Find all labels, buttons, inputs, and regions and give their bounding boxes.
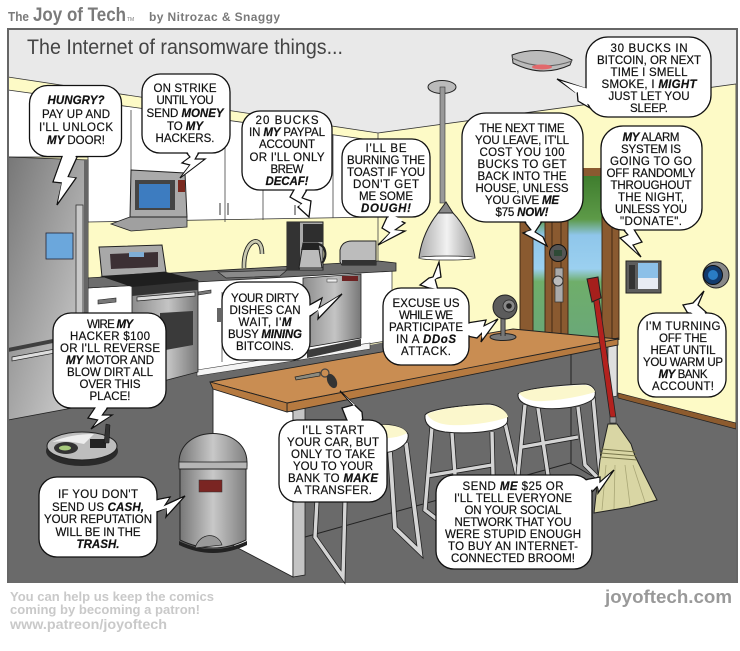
speech bubble: alarm system: "DONATE". [620, 216, 682, 228]
speech bubble: lamp and security camera: WHILE WE [399, 310, 453, 322]
speech bubble: toaster: I'LL BE [366, 143, 407, 155]
speech bubble: robot vacuum: BLOW DIRT ALL [67, 367, 154, 379]
footer: patreon message [9, 590, 214, 632]
speech bubble: fridge: MY DOOR! [47, 135, 105, 147]
speech bubble: trash can [39, 477, 185, 557]
speech bubble: microwave: ON STRIKE [154, 83, 217, 95]
speech bubble: coffee maker: IN MY PAYPAL [249, 127, 326, 139]
header: The Joy of Tech by Nitrozac & Snaggy: by Nitrozac & Snaggy [149, 10, 280, 24]
speech bubble: car keys [279, 391, 387, 502]
speech bubble: lamp and security camera: ATTACK. [401, 346, 451, 358]
speech bubble: dishwasher [222, 282, 342, 360]
header: The Joy of Tech by Nitrozac & Snaggy [8, 5, 280, 26]
speech bubble: door lock: YOU GIVE ME [485, 195, 559, 207]
speech bubble: microwave: HACKERS. [156, 133, 214, 145]
speech bubble: car keys: YOUR CAR, BUT [287, 437, 379, 449]
speech bubble: alarm system: SYSTEM IS [621, 144, 681, 156]
speech bubble: lamp and security camera: PARTICIPATE [389, 322, 463, 334]
speech bubble: trash can: WILL BE IN THE [56, 527, 141, 539]
icon: refrigerator [8, 157, 88, 420]
speech bubble: toaster [342, 139, 430, 245]
icon: smart door lock [550, 244, 566, 262]
speech bubble: robot vacuum: HACKER $100 [70, 331, 150, 343]
speech bubble: car keys: I'LL START [302, 425, 364, 437]
speech bubble: thermostat: ACCOUNT! [652, 381, 714, 393]
speech bubble: robot vacuum: PLACE! [90, 391, 130, 403]
speech bubble: coffee maker: BREW [270, 164, 304, 176]
stool: right [518, 384, 600, 477]
speech bubble: broom: NETWORK THAT YOU [454, 517, 572, 529]
speech bubble: toaster: ME SOME [359, 191, 413, 203]
icon: car keys [295, 369, 339, 390]
speech bubble: dishwasher: BUSY MINING [228, 329, 302, 341]
speech bubble: car keys: A TRANSFER. [294, 485, 372, 497]
speech bubble: coffee maker: DECAF! [266, 176, 309, 188]
speech bubble: smoke alarm: TIME I SMELL [610, 67, 688, 79]
counter and lower cabinets [87, 261, 396, 395]
speech bubble: alarm system: OFF RANDOMLY [606, 168, 696, 180]
speech bubble: coffee maker: ACCOUNT [259, 139, 315, 151]
speech bubble: fridge: HUNGRY? [48, 95, 104, 107]
speech bubble: fridge [30, 86, 122, 205]
speech bubble: door lock: YOU LEAVE, IT'LL [475, 135, 570, 147]
speech bubble: toaster: TOAST IF YOU [347, 167, 425, 179]
icon: dishwasher [303, 274, 361, 358]
baseboard [618, 393, 736, 429]
speech bubble: smoke alarm [557, 37, 711, 117]
stool: middle [425, 404, 517, 520]
speech bubble: toaster: DOUGH! [361, 203, 411, 215]
icon: stove [99, 245, 198, 385]
upper cabinets [8, 90, 378, 262]
speech bubble: robot vacuum: MY MOTOR AND [66, 355, 154, 367]
speech bubble: robot vacuum: OR I'LL REVERSE [60, 343, 160, 355]
speech bubble: lamp and security camera [383, 262, 498, 365]
speech bubble: smoke alarm: SMOKE, I MIGHT [602, 79, 697, 91]
speech bubble: broom: SEND ME $25 OR [462, 481, 564, 493]
speech bubble: trash can: YOUR REPUTATION [44, 514, 152, 526]
speech bubble: coffee maker: 20 BUCKS [256, 115, 319, 127]
icon: pendant lamp [419, 80, 475, 260]
door with window [520, 167, 619, 340]
speech bubble: alarm system: UNLESS YOU [615, 204, 687, 216]
speech bubble: fridge: PAY UP AND [42, 109, 110, 121]
header: The Joy of Tech by Nitrozac & Snaggy: TM [127, 17, 134, 23]
speech bubble: dishwasher: YOUR DIRTY [231, 293, 299, 305]
speech bubble: trash can: TRASH. [76, 539, 120, 551]
speech bubble: robot vacuum [53, 313, 166, 429]
kitchen island [210, 329, 618, 577]
speech bubble: thermostat: I'M TURNING [646, 321, 721, 333]
speech bubble: alarm system [601, 126, 702, 257]
speech bubble: microwave: TO MY [167, 121, 204, 133]
speech bubble: door lock: $75 NOW! [496, 207, 549, 219]
speech bubble: broom: CONNECTED BROOM! [451, 553, 575, 565]
speech bubble: door lock [462, 113, 583, 246]
speech bubble: door lock: THE NEXT TIME [480, 123, 565, 135]
speech bubble: alarm system: GOING TO GO [610, 156, 692, 168]
speech bubble: alarm system: THE NIGHT, [618, 192, 684, 204]
speech bubble: alarm system: MY ALARM [622, 132, 680, 144]
header: The Joy of Tech by Nitrozac & Snaggy: The [8, 9, 29, 24]
speech bubble: microwave: SEND MONEY [146, 108, 225, 120]
speech bubble: smoke alarm: JUST LET YOU [608, 91, 690, 103]
icon: smart thermostat [703, 262, 729, 288]
title: The Internet of ransomware things... [27, 36, 343, 59]
icon: faucet and sink [218, 241, 287, 278]
icon: coffee maker [287, 222, 325, 270]
icon: toaster [340, 241, 376, 265]
speech bubble: dishwasher: WAIT, I'M [238, 317, 292, 329]
speech bubble: smoke alarm: 30 BUCKS IN [610, 43, 688, 55]
speech bubble: microwave: UNTIL YOU [156, 95, 214, 107]
icon: smoke alarm [512, 51, 572, 71]
speech bubble: car keys: BANK TO MAKE [288, 473, 378, 485]
speech bubble: broom: ON YOUR SOCIAL [464, 505, 562, 517]
icon: security camera [490, 295, 517, 340]
door handle [553, 268, 563, 302]
speech bubble: trash can: IF YOU DON'T [58, 489, 138, 501]
speech bubble: toaster: DON'T GET [353, 179, 419, 191]
speech bubble: thermostat: OFF THE [659, 333, 707, 345]
speech bubble: fridge: I'LL UNLOCK [39, 122, 113, 134]
speech bubble: coffee maker [242, 111, 332, 217]
footer: patreon message: You can help us keep the comics [10, 590, 214, 604]
speech bubble: toaster: BURNING THE [347, 155, 425, 167]
speech bubble: lamp and security camera: IN A DDoS [396, 334, 456, 346]
speech bubble: broom: WERE STUPID ENOUGH [445, 529, 581, 541]
speech bubble: dishwasher: DISHES CAN [230, 305, 300, 317]
speech bubble: broom [436, 470, 614, 569]
stool: left [315, 424, 420, 577]
speech bubble: broom: TO BUY AN INTERNET- [448, 541, 578, 553]
speech bubble: car keys: YOU TO YOUR [293, 461, 373, 473]
speech bubble: smoke alarm: BITCOIN, OR NEXT [597, 55, 701, 67]
header: The Joy of Tech by Nitrozac & Snaggy: Joy of Tech [33, 5, 126, 26]
speech bubble: trash can: SEND US CASH, [52, 502, 144, 514]
speech bubble: lamp and security camera: EXCUSE US [392, 298, 460, 310]
speech bubble: microwave [142, 74, 230, 178]
kitchen walls [8, 77, 736, 430]
speech bubble: robot vacuum: WIRE MY [87, 319, 134, 331]
icon: smart broom [587, 277, 657, 513]
footer: website: joyoftech.com [604, 587, 732, 607]
speech bubble: car keys: ONLY TO TAKE [291, 449, 375, 461]
footer: patreon message: www.patreon/joyoftech [9, 616, 167, 632]
speech bubble: thermostat: MY BANK [658, 369, 708, 381]
speech bubble: thermostat: YOU WARM UP [643, 357, 723, 369]
speech bubble: smoke alarm: SLEEP. [630, 103, 668, 115]
speech bubble: door lock: COST YOU 100 [480, 147, 564, 159]
speech bubble: alarm system: THROUGHOUT [610, 180, 692, 192]
speech bubble: broom: I'LL TELL EVERYONE [454, 493, 572, 505]
icon: robot vacuum [46, 424, 118, 466]
icon: smart trash can [179, 434, 247, 553]
speech bubble: door lock: BACK INTO THE [478, 171, 567, 183]
speech bubble: thermostat [638, 291, 726, 397]
icon: microwave [111, 170, 187, 231]
speech bubble: thermostat: HEAT UNTIL [650, 345, 716, 357]
speech bubble: robot vacuum: OVER THIS [80, 379, 141, 391]
speech bubble: dishwasher: BITCOINS. [236, 341, 294, 353]
speech bubble: door lock: HOUSE, UNLESS [476, 183, 569, 195]
footer: patreon message: coming by becoming a patron! [10, 603, 200, 617]
speech bubble: coffee maker: OR I'LL ONLY [250, 152, 325, 164]
icon: smart alarm panel [626, 261, 661, 293]
speech bubble: door lock: BUCKS TO GET [478, 159, 566, 171]
floor [8, 340, 736, 583]
